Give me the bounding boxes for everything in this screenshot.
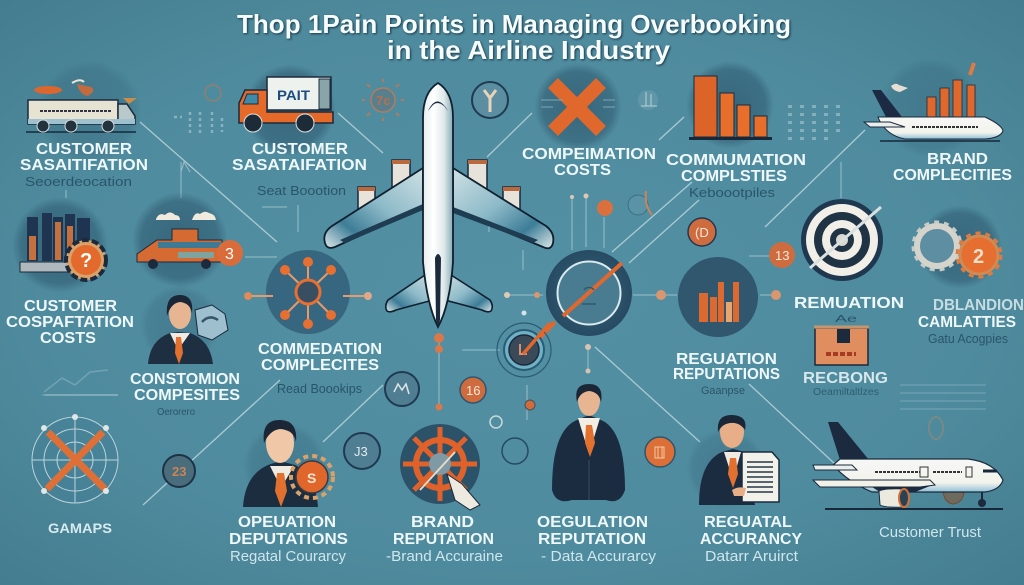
- icon: faint lines: [900, 385, 986, 439]
- icon: sun badge: 7c: [376, 93, 390, 108]
- label: customer satisfaction 2: [232, 141, 367, 198]
- badges: numbers on right: (D: [695, 225, 709, 240]
- label: customer trust: Customer Trust: [879, 524, 982, 541]
- label: customer composites: [130, 371, 240, 418]
- icon: orange train: [132, 192, 228, 288]
- label: customer satisfaction: Seoerdeocation: [25, 174, 132, 189]
- icon: orange box: [814, 327, 869, 365]
- label: customer composites: CONSTOMION: [130, 371, 240, 388]
- badges: middle circles: 16: [466, 383, 480, 398]
- icon: person with badge: [140, 285, 228, 365]
- icon: bars with question gear: [12, 197, 108, 293]
- icon: central hub dial: [523, 250, 632, 355]
- label: reckoning: Oeamiltaltlzes: [813, 387, 879, 398]
- icon: bullseye target: [801, 199, 883, 281]
- label: customer compensation costs: COSPAFTATION: [6, 314, 134, 331]
- label: brand casualties: Gatu Acogpies: [928, 331, 1008, 346]
- label: remuneration: Ae: [835, 314, 858, 325]
- label: operation deputations: Regatal Courarcy: [230, 548, 346, 565]
- icon: orange truck: [239, 64, 336, 156]
- label: customer satisfaction: CUSTOMER: [36, 141, 132, 158]
- icon: orange wheel gear with tag: [400, 424, 480, 510]
- icon: orange truck: PAIT: [277, 87, 310, 103]
- icon: twin gears: 2: [973, 246, 984, 268]
- label: operation deputations: DEPUTATIONS: [229, 531, 348, 548]
- label: brand reputation: [386, 514, 503, 565]
- label: regulation reputation: OEGULATION: [537, 514, 648, 531]
- icon: white truck: [26, 60, 142, 164]
- icon: faint line chart: [42, 370, 118, 395]
- label: reckoning: RECBONG: [803, 370, 888, 387]
- label: communication complexities 2: COMMEDATION: [258, 341, 382, 358]
- label: communication complexities: COMMUMATION: [666, 152, 806, 169]
- title: Thop 1Pain Points in Managing Overbooking: [237, 9, 791, 39]
- icon: faint dot grid: [790, 105, 838, 141]
- label: customer compensation costs: [6, 298, 134, 347]
- icon: small target: [497, 323, 551, 377]
- label: gaps: GAMAPS: [48, 520, 112, 536]
- icon: orange X: [534, 63, 622, 151]
- label: regulation reputations: Gaanpse: [701, 385, 745, 397]
- badge: 3: 3: [225, 246, 234, 263]
- icon: falling bar chart: [638, 61, 774, 149]
- label: regulation reputations: [673, 351, 780, 397]
- badge: 3: [217, 240, 243, 266]
- connector lines: [45, 113, 865, 505]
- label: brand casualties: CAMLATTIES: [918, 314, 1016, 331]
- badge: orange circle: [645, 437, 675, 467]
- icon: airliner on ground: [813, 422, 1003, 509]
- icon: person with gear: [243, 420, 333, 507]
- icon: wrench: [472, 82, 508, 118]
- badges: middle circles: [344, 372, 535, 469]
- label: regulatory accuracy: Datarr Aruirct: [705, 548, 799, 565]
- label: customer satisfaction 2: CUSTOMER: [252, 141, 348, 158]
- label: brand casualties: [918, 297, 1024, 346]
- label: communication complexities: COMPLSTIES: [681, 168, 787, 185]
- label: customer satisfaction: SASAITIFATION: [20, 157, 148, 174]
- label: communication complexities: Keboootpiles: [689, 185, 776, 200]
- label: communication complexities 2: COMPLECITES: [261, 357, 379, 374]
- label: compensation costs: COMPEIMATION: [522, 146, 656, 163]
- label: customer composites: Oerorero: [157, 407, 195, 418]
- label: communication complexities 2: [258, 341, 382, 396]
- label: brand complexities: [893, 151, 1012, 184]
- label: regulation reputations: REPUTATIONS: [673, 366, 780, 383]
- icon: person with gear: S: [307, 470, 316, 486]
- label: customer compensation costs: COSTS: [40, 330, 96, 347]
- icon: airplane with bars: [864, 58, 1003, 158]
- label: regulation reputations: REGUATION: [676, 351, 777, 368]
- label: brand complexities: BRAND: [927, 151, 988, 168]
- label: compensation costs: COSTS: [554, 162, 611, 179]
- label: brand complexities: COMPLECITIES: [893, 167, 1012, 184]
- icon: faint chart: [174, 85, 222, 134]
- label: reckoning: [803, 370, 888, 398]
- label: customer satisfaction: [20, 141, 148, 189]
- badges: numbers on right: 13: [775, 248, 789, 263]
- icon: bars with question gear: ?: [80, 250, 92, 272]
- label: customer compensation costs: CUSTOMER: [24, 298, 117, 315]
- icon: network hub: [244, 250, 372, 334]
- badge: left dark circle: [163, 455, 195, 487]
- icon: bar chart circle: [678, 257, 758, 337]
- label: communication complexities 2: Read Boookips: [277, 381, 362, 396]
- label: regulatory accuracy: [700, 514, 803, 565]
- label: regulatory accuracy: ACCURANCY: [700, 531, 803, 548]
- icon: standing businessman: [552, 384, 625, 501]
- label: communication complexities: [666, 152, 806, 200]
- label: brand reputation: -Brand Accuraine: [386, 548, 503, 565]
- badges: middle circles: J3: [354, 444, 368, 459]
- icon: twin gears: [913, 205, 1002, 289]
- label: operation deputations: OPEUATION: [238, 514, 336, 531]
- icon: person with document: [686, 415, 779, 508]
- label: regulation reputation: - Data Accurarcy: [541, 548, 657, 565]
- label: customer satisfaction 2: Seat Boootion: [257, 183, 346, 198]
- central airplane: [324, 83, 553, 327]
- badge: left dark circle: 23: [172, 464, 186, 479]
- label: regulation reputation: REPUTATION: [538, 531, 646, 548]
- label: customer composites: COMPESITES: [134, 387, 240, 404]
- label: compensation costs: [522, 146, 656, 179]
- label: customer satisfaction 2: SASATAIFATION: [232, 157, 367, 174]
- label: brand reputation: REPUTATION: [393, 531, 494, 548]
- label: brand reputation: BRAND: [411, 514, 474, 531]
- label: remuneration: [794, 295, 904, 325]
- badges: numbers on right: [597, 191, 795, 268]
- icon: crossed compass: [31, 414, 119, 504]
- label: operation deputations: [229, 514, 348, 565]
- icon: sun badge: [362, 79, 404, 121]
- title: [237, 9, 791, 65]
- label: regulation reputation: [537, 514, 657, 565]
- title: in the Airline Industry: [387, 35, 671, 65]
- label: brand casualties: DBLANDION: [933, 297, 1024, 314]
- label: regulatory accuracy: REGUATAL: [704, 514, 792, 531]
- label: remuneration: REMUATION: [794, 295, 904, 312]
